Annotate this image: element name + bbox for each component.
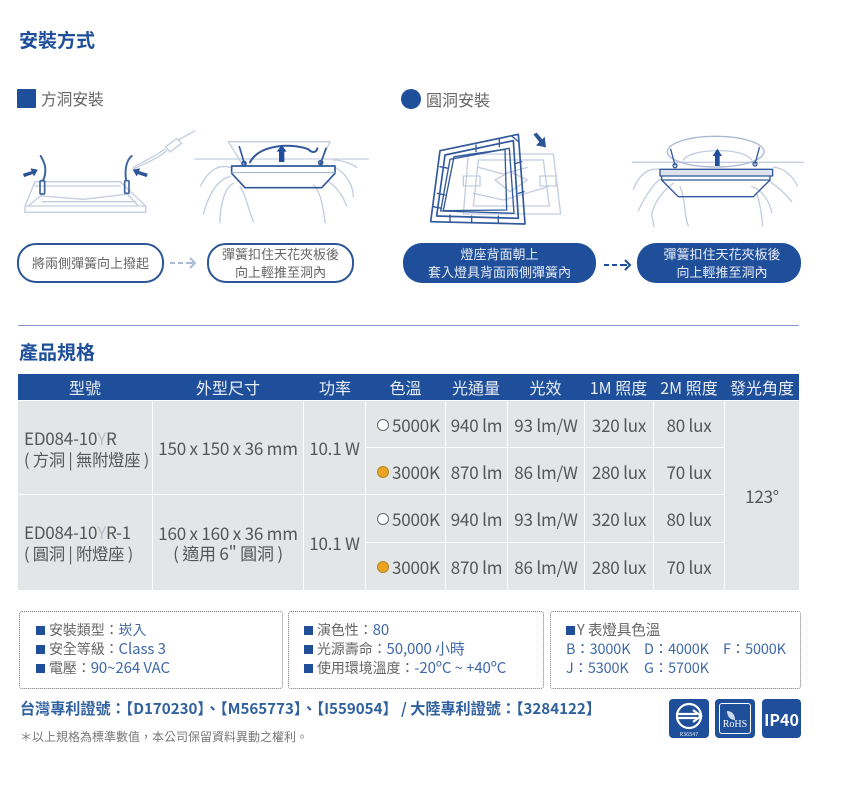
panel: Y colour temperature codes: B：3000K [566, 638, 630, 659]
callout: step 2 square hole: 向上輕推至洞內 [235, 262, 326, 281]
icon: 3000K amber dot [377, 561, 389, 573]
beam angle cell [725, 401, 799, 590]
callout: step 2 square hole [207, 243, 354, 283]
disclaimer note: ＊以上規格為標準數值，本公司保留資料異動之權利。 [20, 728, 308, 745]
icon: blue square [17, 89, 36, 108]
callout: step 1 square hole: 將兩側彈簧向上撥起 [32, 253, 149, 272]
model cell: square hole: ED084-10YR [24, 425, 117, 450]
panel: installation type, safety, voltage: 安全等級：Class 3 [49, 638, 166, 659]
callout: step 1 round hole: 套入燈具背面兩側彈簧內 [428, 262, 571, 281]
table header: 光通量 [452, 375, 500, 399]
table: specifications: 870 lm [451, 554, 502, 579]
icon: up arrow [277, 145, 287, 162]
table: specifications: 86 lm/W [514, 554, 578, 579]
panel: Y colour temperature codes: Y 表燈具色溫 [577, 619, 660, 640]
table: specifications: 5000K [392, 506, 440, 531]
model cell: round hole: ( 圓洞 | 附燈座 ) [24, 541, 133, 565]
table: specifications: 160 x 160 x 36 mm [158, 520, 298, 544]
model cell: square hole [18, 401, 152, 494]
heading: round hole installation [401, 87, 490, 111]
table header: 光效 [529, 375, 562, 399]
beam angle cell: 123° [745, 483, 779, 508]
table: specifications: 280 lux [592, 458, 646, 484]
icon: 5000K white dot [377, 513, 389, 525]
panel: CRI, lifetime, temperature: 使用環境溫度：-20ºC ~ +40ºC [317, 657, 506, 678]
table: specifications: 150 x 150 x 36 mm [158, 435, 298, 460]
arrow: round step 1 to 2 [604, 259, 632, 271]
table: specifications: 940 lm [451, 412, 502, 436]
panel: CRI, lifetime, temperature: 光源壽命：50,000 小時 [317, 638, 465, 659]
icon: diagonal arrow [533, 133, 546, 147]
table: specifications: 940 lm [451, 506, 502, 531]
patent numbers: 台灣專利證號：【D170230】、【M565773】、【I559054】 / 大陸專利證號：【3284122】 [20, 697, 601, 719]
model cell: square hole: ( 方洞 | 無附燈座 ) [24, 447, 149, 471]
panel: Y colour temperature codes: F：5000K [723, 638, 786, 659]
panel: Y colour temperature codes: J：5300K [566, 657, 629, 678]
panel: installation type, safety, voltage: 電壓：90~264 VAC [49, 657, 170, 678]
table: specifications: 10.1 W [309, 435, 360, 460]
panel: installation type, safety, voltage: 安裝類型：崁入 [49, 620, 146, 640]
table: specifications: 280 lux [592, 554, 646, 579]
illustration: bending springs upward on square panel [23, 130, 196, 213]
model cell: round hole: ED084-10YR-1 [24, 519, 131, 544]
badge: RoHS [715, 699, 755, 738]
heading: product specifications: 產品規格 [19, 338, 95, 365]
table header: 色溫 [389, 375, 422, 399]
table: specifications: 80 lux [666, 506, 712, 531]
table: specifications: 3000K [392, 554, 440, 579]
icon: arrow right spring [133, 169, 147, 177]
panel: Y colour temperature codes [550, 611, 801, 689]
icon: 5000K white dot [377, 419, 389, 431]
heading: square hole installation [17, 87, 104, 110]
table: specifications: 80 lux [666, 412, 712, 436]
icon: up arrow [713, 149, 722, 166]
callout: step 2 square hole: 彈簧扣住天花夾板後 [222, 244, 339, 263]
table: specifications: 3000K [392, 458, 440, 484]
badge: RoHS: RoHS [723, 718, 747, 730]
table header [18, 374, 799, 400]
label: square hole: 方洞安裝 [41, 87, 104, 110]
table: specifications: 70 lux [666, 554, 712, 579]
panel: Y colour temperature codes: G：5700K [644, 657, 709, 678]
table header: 功率 [319, 375, 351, 399]
table header: 發光角度 [730, 375, 794, 399]
table: specifications: 86 lm/W [514, 458, 578, 484]
table header: 1M 照度 [590, 375, 647, 399]
badge: IP40 [762, 699, 801, 738]
callout: step 2 round hole: 彈簧扣住天花夾板後 [663, 244, 780, 263]
table: specifications: 5000K [392, 412, 440, 436]
table header: 外型尺寸 [196, 375, 260, 399]
illustration: inserting round-hole base onto panel [430, 132, 562, 225]
label: round hole: 圓洞安裝 [426, 87, 490, 111]
table: specifications: 10.1 W [309, 530, 360, 555]
panel: CRI, lifetime, temperature: 演色性：80 [317, 619, 389, 640]
table: specifications: 70 lux [666, 458, 712, 484]
arrow: square step 1 to 2 [170, 257, 196, 269]
illustration: pushing square light into ceiling [194, 141, 369, 224]
table header: 2M 照度 [660, 375, 718, 399]
badge: BSMI [669, 699, 709, 738]
callout: step 1 round hole: 燈座背面朝上 [460, 244, 538, 263]
badge: BSMI: R36547 [680, 730, 698, 738]
callout: step 2 round hole [637, 243, 801, 283]
table: specifications [18, 374, 799, 590]
badge: IP40: IP40 [764, 706, 799, 730]
model cell: round hole [18, 495, 152, 590]
illustration: pushing round-hole light into ceiling [632, 136, 804, 228]
table: specifications: 320 lux [592, 506, 646, 531]
callout: step 1 square hole [17, 243, 164, 283]
table: specifications: 320 lux [592, 412, 646, 436]
table: specifications: 870 lm [451, 458, 502, 484]
icon: arrow left spring [23, 169, 37, 177]
panel: CRI, lifetime, temperature [288, 611, 544, 689]
table: specifications: 93 lm/W [514, 412, 578, 436]
title: installation: 安裝方式 [19, 26, 95, 53]
callout: step 1 round hole [403, 243, 596, 283]
table: specifications: 93 lm/W [514, 506, 578, 531]
icon: blue circle [401, 89, 421, 109]
table: specifications: ( 適用 6" 圓洞 ) [173, 540, 283, 564]
panel: installation type, safety, voltage [19, 611, 283, 689]
panel: Y colour temperature codes: D：4000K [644, 638, 709, 659]
table header: 型號 [69, 375, 101, 399]
icon: 3000K amber dot [377, 466, 389, 478]
callout: step 2 round hole: 向上輕推至洞內 [676, 262, 768, 281]
